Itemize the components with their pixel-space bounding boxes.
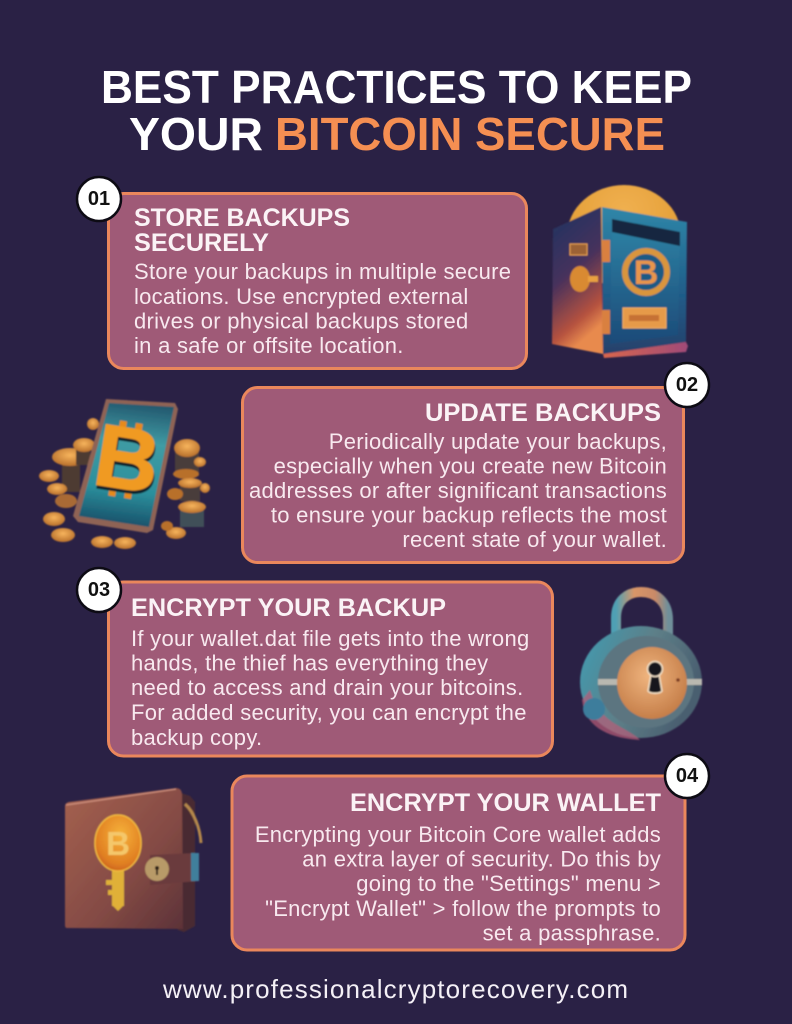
icon: zipper <box>185 804 201 843</box>
icon: bitcoin symbol: B <box>88 405 166 512</box>
icon: padlock <box>580 592 702 740</box>
text: encrypt your backup body: For added security, you can encrypt the <box>131 700 527 725</box>
title: BEST PRACTICES TO KEEP <box>101 61 692 113</box>
icon: wallet strap <box>150 853 199 885</box>
title: BITCOIN SECURE <box>275 108 665 160</box>
text: update backups body: addresses or after significant transactions <box>249 478 667 503</box>
icon: keypad <box>623 308 666 328</box>
text: update backups body <box>249 429 667 552</box>
icon: phone with bitcoin and coins <box>39 399 210 549</box>
text: encrypt your backup body <box>131 626 529 750</box>
heading: encrypt your wallet: ENCRYPT YOUR WALLET <box>350 789 661 817</box>
heading: store backups securely <box>134 204 350 257</box>
text: store backups body <box>134 259 511 358</box>
icon: gold coin behind safe <box>567 185 681 287</box>
text: store backups body: locations. Use encrypted external <box>134 284 469 309</box>
text: store backups body: Store your backups in multiple secure <box>134 259 511 284</box>
number badge 02 <box>665 363 709 407</box>
icon: safe front face <box>602 207 687 354</box>
icon: bitcoin safe: B <box>634 254 658 292</box>
icon: inner panel <box>610 219 680 344</box>
number badge 03: 03 <box>88 579 110 601</box>
number badge 03 <box>77 568 121 612</box>
icon: wallet front <box>65 788 183 929</box>
icon: coin piles <box>39 418 210 549</box>
text: update backups body: to ensure your backup reflects the most <box>271 502 667 528</box>
icon: door handle <box>570 266 590 292</box>
panel: update backups <box>242 388 684 562</box>
text: encrypt your wallet body: an extra layer of security. Do this by <box>302 846 661 872</box>
number badge 01: 01 <box>88 188 110 210</box>
icon: phone body <box>73 399 178 533</box>
text: encrypt your wallet body <box>255 822 661 946</box>
text: encrypt your wallet body: Encrypting your Bitcoin Core wallet adds <box>255 822 661 847</box>
text: update backups body: especially when you create new Bitcoin <box>274 454 667 478</box>
number badge 01 <box>77 177 121 221</box>
footer url: www.professionalcryptorecovery.com <box>162 974 628 1004</box>
icon: bitcoin symbol: B <box>89 408 167 516</box>
heading: store backups securely: SECURELY <box>134 229 269 257</box>
number badge 04 <box>665 754 709 798</box>
text: update backups body: recent state of your wallet. <box>402 527 667 552</box>
icon: phone screen <box>79 403 174 527</box>
heading: update backups: UPDATE BACKUPS <box>425 399 661 427</box>
text: encrypt your wallet body: set a passphrase. <box>483 920 661 946</box>
panel: encrypt your backup <box>108 582 552 756</box>
icon: bitcoin safe <box>552 185 688 358</box>
icon: bitcoin key <box>95 815 141 911</box>
title: YOUR <box>129 108 263 160</box>
icon: safe base <box>603 342 688 358</box>
text: encrypt your backup body: need to access and drain your bitcoins. <box>131 675 523 700</box>
text: encrypt your backup body: If your wallet.dat file gets into the wrong <box>131 626 529 651</box>
panel: encrypt your wallet <box>232 776 685 950</box>
icon: bitcoin dial <box>625 251 667 293</box>
text: encrypt your backup body: hands, the thief has everything they <box>131 650 488 676</box>
text: encrypt your wallet body: "Encrypt Wallet" > follow the prompts to <box>265 896 661 921</box>
icon: gold plate <box>617 647 687 719</box>
icon: lock bar <box>598 679 702 685</box>
text: encrypt your backup body: backup copy. <box>131 725 262 750</box>
text: update backups body: Periodically update your backups, <box>329 429 667 454</box>
icon: wallet button <box>145 857 169 881</box>
icon: door label <box>570 244 587 255</box>
icon: hinges <box>602 240 610 262</box>
text: store backups body: in a safe or offsite location. <box>134 333 404 358</box>
heading: encrypt your backup: ENCRYPT YOUR BACKUP <box>131 594 446 622</box>
icon: safe open door <box>552 207 603 354</box>
title <box>101 61 692 160</box>
icon: keyhole <box>648 662 662 693</box>
number badge 02: 02 <box>676 374 698 396</box>
icon: wallet with bitcoin key <box>65 788 201 932</box>
icon: lock ring <box>580 626 702 738</box>
icon: shackle <box>616 592 668 636</box>
text: store backups body: drives or physical backups stored <box>134 308 469 334</box>
panel: store backups securely <box>108 194 526 368</box>
icon: wallet back <box>178 792 195 932</box>
text: encrypt your wallet body: going to the "Settings" menu > <box>356 871 661 896</box>
heading: store backups securely: STORE BACKUPS <box>134 204 350 232</box>
icon: bitcoin key: B <box>106 825 130 862</box>
number badge 04: 04 <box>676 765 699 787</box>
